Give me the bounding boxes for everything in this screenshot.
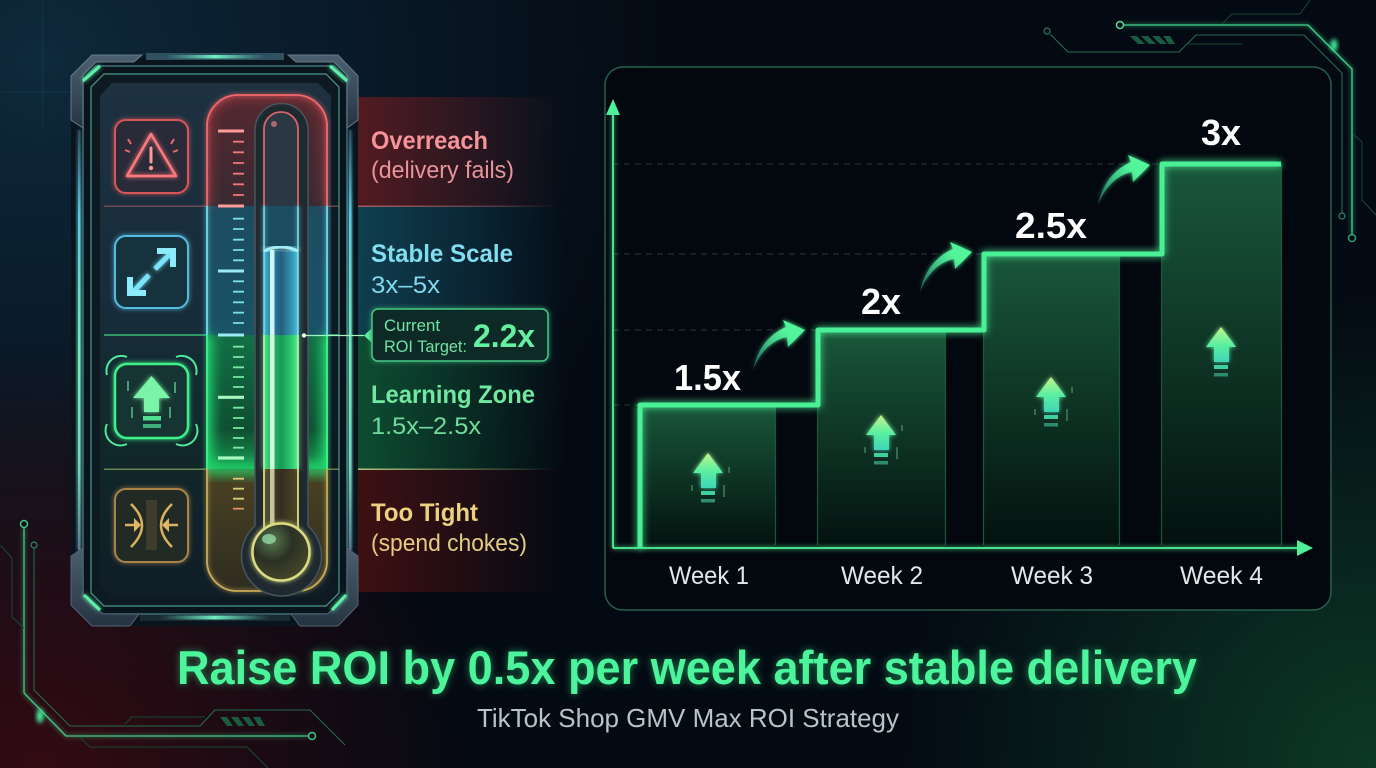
label: stable scale: 3x–5x xyxy=(371,272,440,299)
week labels: Week 2 xyxy=(841,562,923,590)
panel: weekly ROI step chart xyxy=(605,67,1331,610)
value labels xyxy=(674,112,1241,398)
label: overreach xyxy=(371,127,514,184)
label: learning zone: 1.5x–2.5x xyxy=(371,413,481,440)
dashed guide lines xyxy=(613,164,1162,405)
label: stable scale: Stable Scale xyxy=(371,240,513,268)
zone column xyxy=(206,94,328,592)
icon: up arrow week 3 xyxy=(1035,377,1072,426)
callout: current ROI target xyxy=(302,309,548,361)
label: overreach: (delivery fails) xyxy=(371,157,514,184)
value labels: 2.5x xyxy=(1015,205,1087,246)
title: Raise ROI by 0.5x per week after stable delivery xyxy=(177,641,1197,694)
icon: up arrow week 2 xyxy=(865,415,902,464)
label: too tight: Too Tight xyxy=(371,499,479,527)
label: stable scale xyxy=(371,240,513,299)
curved arrow: week 1 to 2 xyxy=(753,320,805,370)
week labels: Week 1 xyxy=(669,562,749,590)
icon: squeeze arrows xyxy=(115,489,188,562)
curved arrow: week 3 to 4 xyxy=(1098,155,1150,205)
value labels: 1.5x xyxy=(674,357,741,398)
thermometer device panel xyxy=(71,53,358,626)
value labels: 2x xyxy=(861,281,901,322)
axes xyxy=(606,99,1313,556)
callout: current ROI target: 2.2x xyxy=(473,318,535,354)
label: learning zone: Learning Zone xyxy=(371,381,535,409)
scale ticks xyxy=(218,131,244,519)
icon: up arrow week 4 xyxy=(1206,327,1236,376)
label: learning zone xyxy=(371,381,535,440)
zone divider lines xyxy=(104,206,339,470)
label: overreach: Overreach xyxy=(371,127,488,155)
label: too tight: (spend chokes) xyxy=(371,530,527,557)
icon: expand arrows xyxy=(115,236,188,308)
zone bands behind labels xyxy=(350,97,565,592)
week labels xyxy=(669,562,1263,590)
thermometer tube xyxy=(242,104,322,596)
circuit traces: top right xyxy=(1044,0,1376,242)
step line xyxy=(640,164,1281,548)
icon: warning triangle xyxy=(115,120,188,193)
label: too tight xyxy=(371,499,527,557)
callout: current ROI target: Current xyxy=(384,317,440,335)
bars xyxy=(640,164,1282,548)
week labels: Week 4 xyxy=(1180,562,1263,590)
zone column outlines xyxy=(207,95,327,591)
week labels: Week 3 xyxy=(1011,562,1093,590)
value labels: 3x xyxy=(1201,112,1241,153)
curved arrow: week 2 to 3 xyxy=(920,242,972,292)
circuit traces: bottom left xyxy=(0,520,345,768)
icon: up arrow in green frame xyxy=(106,356,197,445)
callout: current ROI target: ROI Target: xyxy=(384,338,467,356)
title: Raise ROI by 0.5x per week after stable delivery xyxy=(177,641,1197,694)
device outer frame xyxy=(71,53,358,626)
subtitle: TikTok Shop GMV Max ROI Strategy xyxy=(477,703,899,733)
icon: up arrow week 1 xyxy=(692,453,729,502)
